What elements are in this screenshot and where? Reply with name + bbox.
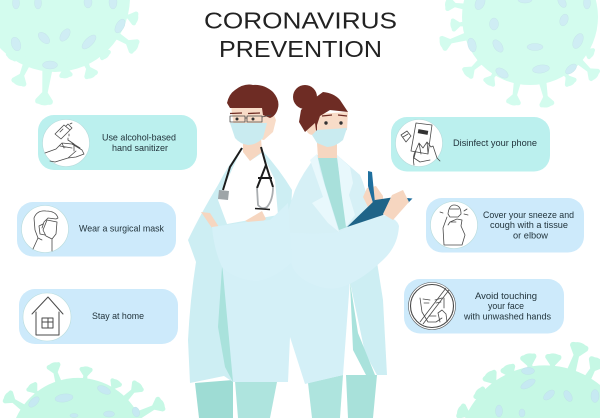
doctors illustration	[188, 85, 412, 418]
text: Disinfect your phone	[453, 138, 537, 149]
male doctor head and shirt	[218, 85, 278, 224]
title: CORONAVIRUS	[204, 8, 397, 34]
icon: crossed-out face	[408, 282, 456, 330]
text: hand sanitizer	[112, 143, 168, 154]
card: avoid touching face	[404, 279, 564, 334]
female doctor coat	[285, 155, 387, 375]
text: Avoid touching	[475, 291, 537, 302]
virus: bottom right	[454, 340, 600, 418]
text: Stay at home	[92, 311, 144, 322]
stethoscope	[218, 147, 273, 210]
text	[102, 132, 176, 154]
text: with unwashed hands	[463, 312, 551, 322]
female doctor head and shirt	[293, 85, 355, 232]
title	[204, 8, 397, 62]
text	[483, 210, 574, 242]
text: Cover your sneeze and	[483, 210, 574, 221]
card: cover sneeze	[426, 198, 584, 252]
virus: bottom left	[1, 361, 167, 418]
text: or elbow	[513, 230, 548, 242]
text: your face	[488, 301, 524, 312]
title: PREVENTION	[219, 36, 382, 62]
text	[463, 291, 551, 322]
female doctor arm	[285, 215, 399, 289]
icon: head with mask	[22, 206, 68, 252]
legs	[195, 375, 377, 418]
coat front panel	[222, 262, 350, 384]
virus: top left	[0, 0, 141, 106]
card: disinfect phone	[391, 117, 550, 172]
male doctor coat	[188, 148, 292, 383]
clipboard and hands	[347, 171, 412, 227]
icon: person coughing into elbow	[430, 202, 478, 248]
text: Use alcohol-based	[102, 132, 176, 144]
icon: phone and wipe	[396, 120, 442, 166]
icon: sanitizer bottle and hands	[42, 120, 90, 166]
icon: house	[23, 293, 71, 341]
text: cough with a tissue	[490, 220, 568, 231]
card: hand sanitizer	[38, 115, 197, 170]
text: Wear a surgical mask	[79, 224, 164, 234]
card: surgical mask	[17, 202, 176, 256]
male doctor crossed arms	[201, 203, 292, 281]
virus: top right	[438, 0, 600, 109]
card: stay at home	[19, 289, 178, 344]
